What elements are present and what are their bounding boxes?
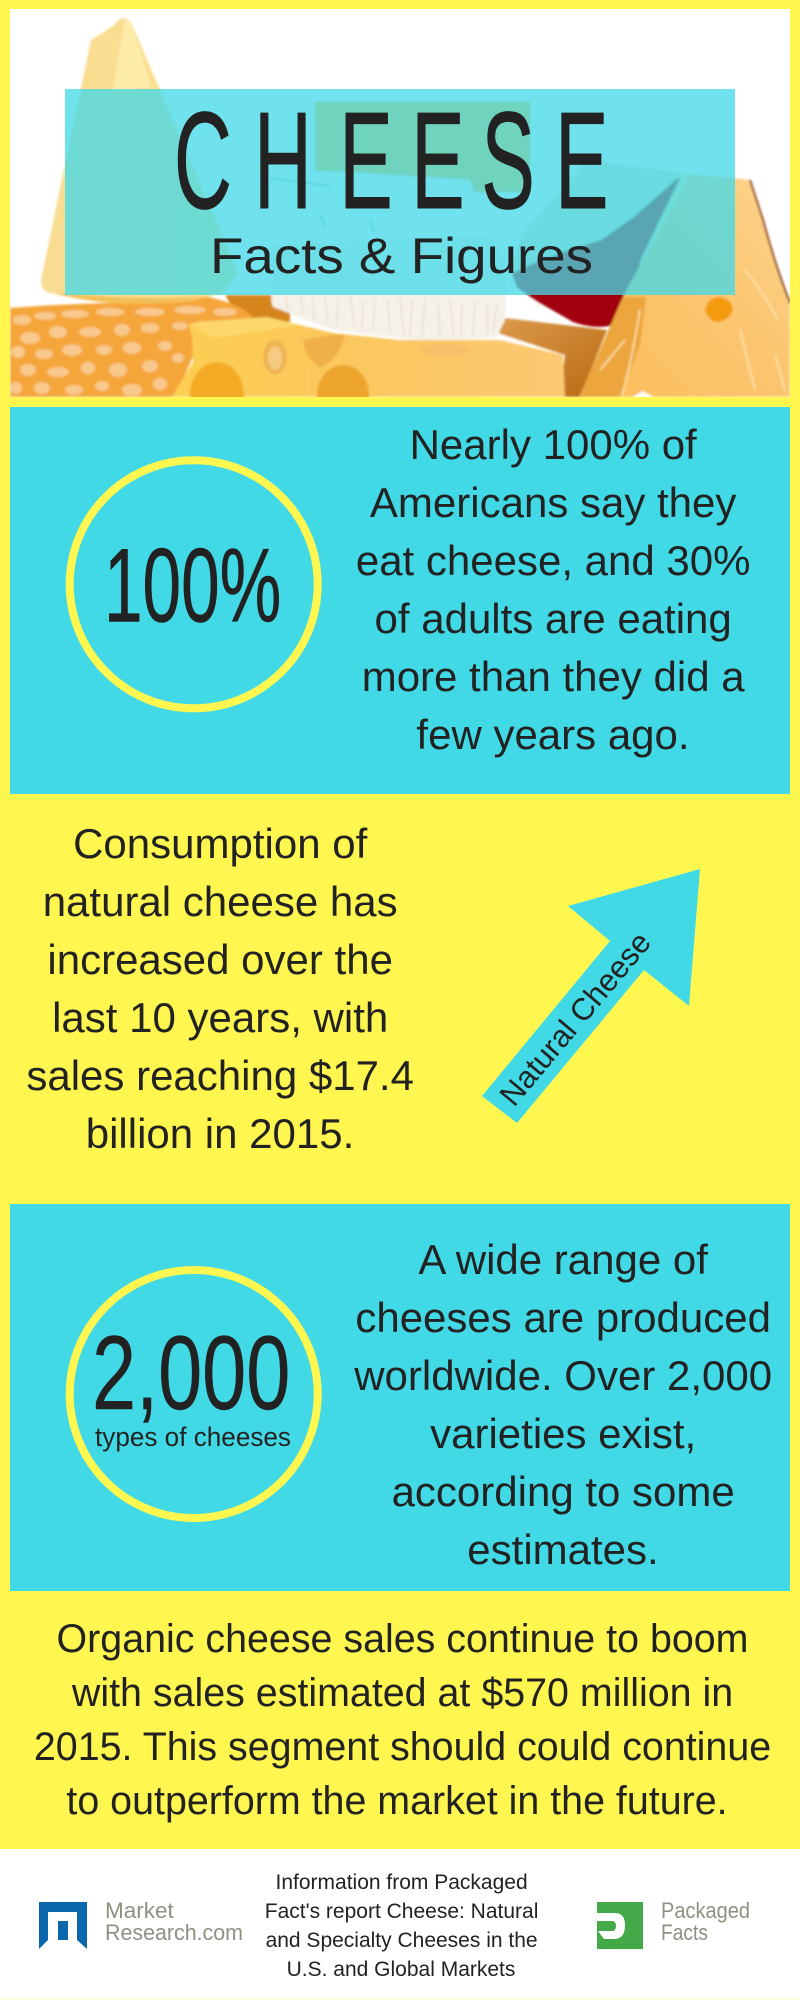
text: varieties: A wide range of	[418, 1236, 708, 1283]
text: varieties: estimates.	[467, 1526, 659, 1573]
panel: organic cheese text: to outperform the market in the future.	[66, 1779, 728, 1823]
panel: organic cheese text: 2015. This segment should could continue	[34, 1725, 771, 1769]
circle stat: 2,000: 2,000	[92, 1314, 290, 1432]
panel: natural cheese	[26, 820, 700, 1157]
marbled cheese	[10, 297, 253, 397]
brown block	[495, 318, 607, 397]
source text: Information from Packaged	[276, 1871, 528, 1894]
right wedge	[609, 176, 790, 397]
title overlay band	[65, 89, 735, 295]
swiss block	[172, 317, 565, 397]
source text: Fact's report Cheese: Natural	[265, 1900, 538, 1923]
panel: 100 percent	[10, 407, 790, 794]
circle stat: 100%: 100%	[104, 526, 281, 644]
text: consumption: increased over the	[47, 936, 393, 983]
logo: MarketResearch.com	[39, 1898, 243, 1949]
arrow: natural cheese growth	[482, 869, 700, 1123]
source text: and Specialty Cheeses in the	[266, 1929, 538, 1952]
text: consumption: billion in 2015.	[86, 1110, 354, 1157]
title: CHEESE	[174, 83, 608, 237]
arrow: natural cheese growth: Natural Cheese	[493, 925, 658, 1112]
text: varieties: according to some	[392, 1468, 735, 1515]
logo: Packaged Facts	[597, 1898, 750, 1949]
panel: footer	[0, 1849, 800, 2000]
text: americans: Nearly 100% of	[410, 421, 697, 468]
text: consumption: Consumption of	[73, 820, 368, 867]
text: americans: few years ago.	[416, 711, 690, 758]
text: americans: Americans say they	[370, 479, 736, 526]
text: americans: of adults are eating	[375, 595, 732, 642]
circle stat: 100%	[70, 460, 318, 708]
white rind cheese	[269, 294, 507, 341]
circle stat: 2,000: types of cheeses	[95, 1422, 291, 1452]
panel: 2,000 types	[10, 1204, 790, 1591]
back block	[315, 102, 530, 192]
circle stat: 2,000	[70, 1270, 318, 1518]
source text: U.S. and Global Markets	[287, 1958, 515, 1981]
pale wedge	[512, 160, 683, 273]
text: americans: eat cheese, and 30%	[356, 537, 750, 584]
text: consumption: last 10 years, with	[52, 994, 388, 1041]
logo: Packaged Facts: Packaged	[661, 1898, 750, 1923]
red wax	[512, 178, 682, 327]
logo: Packaged Facts: Facts	[661, 1920, 708, 1945]
panel: cheese photo header	[10, 9, 790, 428]
panel: organic cheese text: Organic cheese sales continue to boom	[57, 1617, 748, 1661]
tall wedge	[41, 18, 238, 304]
blue cheese	[314, 170, 475, 193]
text: varieties: worldwide. Over 2,000	[353, 1352, 772, 1399]
panel: organic cheese text: with sales estimated at $570 million in	[71, 1671, 733, 1715]
subtitle: Facts & Figures	[210, 228, 593, 284]
text: americans: more than they did a	[362, 653, 745, 700]
text: varieties: cheeses are produced	[355, 1294, 771, 1341]
logo: MarketResearch.com: Market	[105, 1898, 175, 1923]
logo: MarketResearch.com: Research.com	[105, 1920, 243, 1945]
text: consumption: sales reaching $17.4	[26, 1052, 414, 1099]
text: varieties: varieties exist,	[430, 1410, 696, 1457]
text: consumption: natural cheese has	[43, 878, 398, 925]
